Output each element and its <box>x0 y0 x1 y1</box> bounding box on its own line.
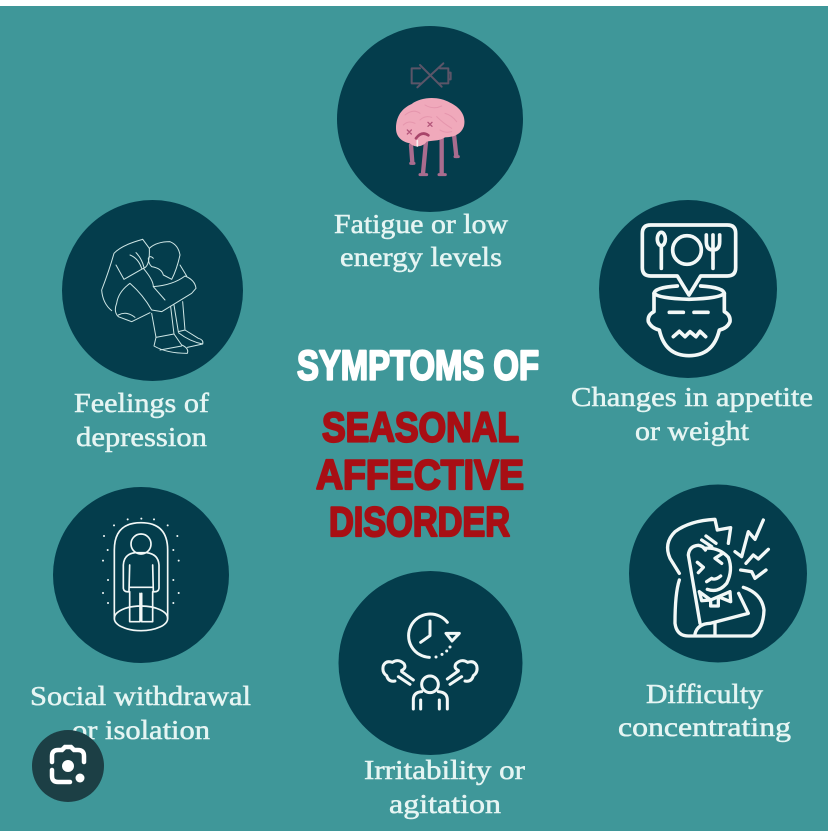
icon: lens button <box>32 730 104 802</box>
panel: fatigue <box>334 26 523 272</box>
heading: seasonal affective disorder: DISORDER <box>329 498 510 545</box>
label: depression: Feelings of <box>74 388 209 418</box>
label: concentrating <box>618 679 791 742</box>
panel: irritability <box>338 571 525 819</box>
label: depression: depression <box>76 422 208 452</box>
label: appetite: or weight <box>635 416 750 446</box>
label: fatigue: energy levels <box>340 242 502 272</box>
icon: seated person hugging knees <box>102 239 203 353</box>
circle: withdrawal <box>53 487 229 663</box>
panel: depression <box>62 200 243 452</box>
label: withdrawal: Social withdrawal <box>30 681 251 711</box>
circle: concentrating <box>629 484 807 662</box>
label: depression <box>74 388 209 452</box>
label: fatigue <box>334 209 509 272</box>
label: irritability: Irritability or <box>364 755 525 785</box>
label: irritability <box>364 755 525 819</box>
circle: depression <box>62 200 243 381</box>
heading: seasonal affective disorder: SEASONAL <box>322 404 519 450</box>
heading: seasonal affective disorder <box>316 404 524 545</box>
panel: appetite <box>571 200 813 446</box>
label: appetite: Changes in appetite <box>571 382 813 412</box>
label: concentrating: concentrating <box>618 712 791 742</box>
label: fatigue: Fatigue or low <box>334 209 509 239</box>
circle: irritability <box>338 571 522 755</box>
label: concentrating: Difficulty <box>646 679 764 709</box>
label: withdrawal: or isolation <box>72 715 211 745</box>
icon: person inside glass capsule <box>103 519 179 631</box>
circle: fatigue <box>337 26 523 212</box>
panel: concentrating <box>618 484 807 742</box>
panel: withdrawal <box>30 487 251 745</box>
icon: stressed man holding head with lightning <box>668 519 768 636</box>
icon: tired brain with empty battery <box>396 63 464 175</box>
circle: appetite <box>599 200 777 378</box>
label: withdrawal <box>30 681 251 745</box>
icon: clock and fuming person <box>383 614 477 709</box>
icon: head with food speech bubble <box>642 225 736 356</box>
label: appetite <box>571 382 813 446</box>
title <box>297 342 539 545</box>
heading: seasonal affective disorder: AFFECTIVE <box>316 451 524 498</box>
heading: symptoms of: SYMPTOMS OF <box>297 342 539 388</box>
label: irritability: agitation <box>389 789 502 819</box>
